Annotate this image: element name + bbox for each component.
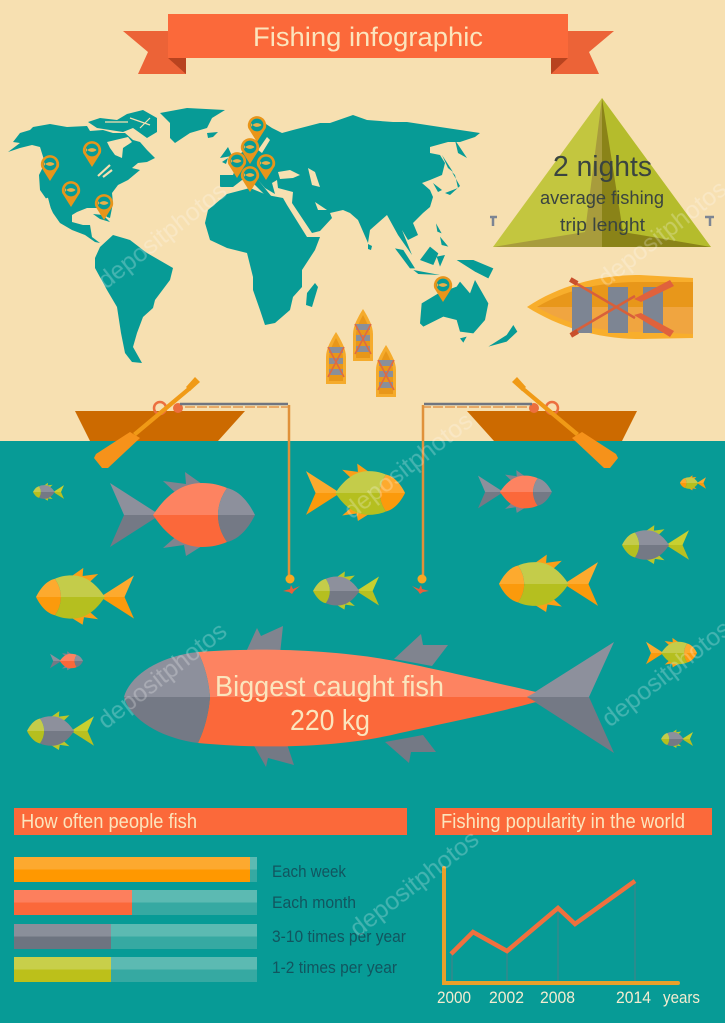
tent text: trip lenght	[560, 214, 645, 235]
new guinea	[457, 260, 493, 278]
arctic islands	[88, 110, 157, 138]
south america	[95, 235, 173, 363]
title ribbon	[123, 14, 614, 74]
caspian sea	[308, 168, 320, 187]
title: Fishing infographic	[253, 22, 483, 52]
great britain	[220, 147, 232, 164]
hudson bay	[107, 137, 132, 158]
tent text	[540, 151, 664, 235]
axis labels: 2014	[616, 988, 651, 1007]
korea and japan	[433, 172, 460, 195]
africa	[205, 188, 320, 325]
axis labels: 2002	[489, 988, 524, 1007]
big fish text: 220 kg	[290, 705, 370, 737]
baltic sea	[258, 137, 270, 153]
big fish text: Biggest caught fish	[215, 671, 444, 703]
big fish text	[215, 671, 444, 737]
axis labels: 2008	[540, 988, 575, 1007]
tent text: 2 nights	[553, 151, 652, 183]
bar labels: 3-10 times per year	[272, 928, 406, 946]
sri lanka	[368, 244, 372, 250]
left fishing boat	[75, 377, 300, 594]
world map	[8, 108, 517, 363]
baja gulf	[47, 198, 51, 213]
sea background	[0, 441, 725, 1023]
watermarks	[92, 175, 725, 943]
madagascar	[306, 283, 318, 307]
kamchatka and sakhalin	[442, 140, 467, 172]
axis labels	[437, 988, 700, 1007]
iceland	[207, 132, 218, 138]
line chart	[437, 868, 700, 1007]
axis labels: years	[663, 988, 700, 1007]
small boats	[326, 309, 396, 397]
bar labels	[272, 863, 406, 977]
watermarks: depositphotos	[92, 617, 232, 735]
fish school	[27, 464, 706, 750]
new zealand	[488, 325, 517, 347]
watermarks: depositphotos	[92, 177, 232, 295]
top-view boat	[527, 275, 693, 339]
tasmania	[460, 337, 467, 343]
bar labels: 1-2 times per year	[272, 959, 397, 977]
cuba	[93, 214, 110, 222]
heading: fishing popularity: Fishing popularity in the world	[441, 811, 685, 833]
black sea	[278, 170, 300, 179]
map pins	[41, 116, 452, 302]
great lakes	[98, 165, 112, 177]
biggest fish	[124, 626, 614, 767]
tent	[490, 98, 714, 247]
greenland	[160, 108, 225, 143]
persian gulf	[315, 202, 327, 210]
eurasia	[220, 115, 480, 255]
north america	[8, 124, 155, 243]
bar labels: Each month	[272, 894, 356, 912]
bar labels: Each week	[272, 863, 347, 881]
bar chart	[14, 857, 406, 982]
tent text: average fishing	[540, 187, 664, 208]
axis labels: 2000	[437, 988, 471, 1007]
right fishing boat	[412, 377, 637, 594]
watermarks: depositphotos	[344, 825, 484, 943]
philippines	[436, 223, 448, 247]
background sky	[0, 0, 725, 441]
heading: how often people fish	[14, 808, 407, 835]
indonesia	[395, 247, 445, 275]
watermarks: depositphotos	[338, 407, 478, 525]
heading: how often people fish: How often people fish	[21, 811, 197, 833]
australia	[420, 280, 488, 333]
